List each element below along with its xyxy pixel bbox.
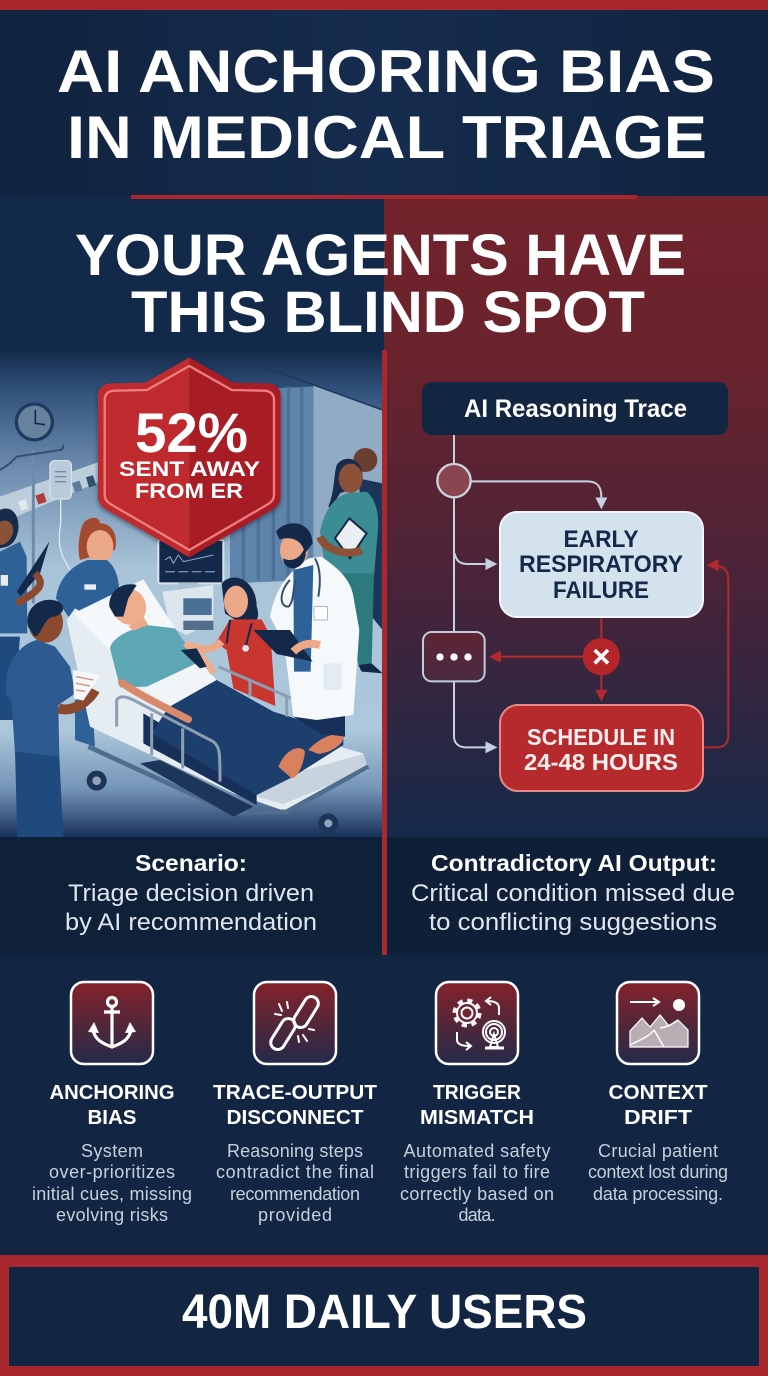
description: Automated safety	[404, 1141, 550, 1161]
right wall	[313, 385, 383, 590]
icon: anchor	[71, 982, 153, 1064]
IV stand and bag	[0, 445, 71, 603]
shield badge: 52% sent away from ER	[98, 357, 281, 557]
footer banner: 40M daily users: 40M DAILY USERS	[182, 1286, 587, 1339]
doctor	[253, 523, 359, 737]
label: ANCHORING	[50, 1081, 174, 1104]
heading: THIS BLIND SPOT	[131, 280, 645, 345]
pillow	[73, 579, 175, 652]
title: IN MEDICAL TRIAGE	[67, 104, 707, 171]
red-haired nurse	[56, 518, 119, 747]
icon: gear, arrows and signal tower	[436, 982, 518, 1064]
caption: scenario: by AI recommendation	[65, 909, 317, 936]
description: context lost during	[588, 1162, 728, 1182]
box: schedule in 24-48 hours: SCHEDULE IN	[527, 724, 675, 750]
blanket	[152, 680, 343, 795]
trace connectors	[454, 435, 601, 747]
description: contradict the final	[216, 1162, 374, 1182]
caption: scenario: Triage decision driven	[68, 880, 314, 907]
wall rail	[0, 462, 100, 523]
description: data processing.	[593, 1184, 723, 1204]
box: schedule in 24-48 hours: 24-48 HOURS	[524, 749, 678, 775]
box: early respiratory failure: RESPIRATORY	[519, 551, 683, 578]
box: early respiratory failure	[500, 512, 703, 617]
bed frame	[67, 608, 368, 833]
teal nurse	[320, 459, 383, 673]
description	[588, 1141, 728, 1204]
trace header	[422, 382, 728, 435]
box: early respiratory failure: FAILURE	[553, 577, 649, 604]
heading	[75, 223, 686, 345]
description: correctly based on	[400, 1184, 554, 1204]
description	[32, 1141, 192, 1225]
description	[400, 1141, 554, 1225]
vertical red divider	[382, 350, 387, 955]
factor: trigger mismatch	[400, 982, 554, 1225]
left half navy background	[0, 196, 384, 356]
trace header: AI Reasoning Trace	[464, 395, 687, 423]
factor: anchoring bias	[32, 982, 192, 1225]
label: TRACE-OUTPUT	[213, 1081, 377, 1104]
back person	[353, 448, 383, 630]
footer banner: 40M daily users	[0, 1255, 768, 1376]
factor: anchoring bias: BIAS	[88, 1106, 136, 1129]
description: triggers fail to fire	[404, 1162, 550, 1182]
caption: contradictory AI output: Critical condition missed due	[411, 880, 735, 907]
right half red background	[384, 196, 768, 838]
illustration: hospital triage scene	[0, 350, 383, 837]
shield badge: 52% sent away from ER: SENT AWAY	[119, 458, 260, 481]
caption: scenario: Scenario:	[135, 850, 247, 876]
curtain	[230, 367, 383, 583]
shield badge: 52% sent away from ER: 52%	[135, 401, 248, 464]
icon: arrow, sun and mountains	[617, 982, 699, 1064]
left nurse with tablet	[0, 509, 49, 720]
factor: context drift: DRIFT	[624, 1106, 693, 1129]
description: initial cues, missing	[32, 1184, 192, 1204]
contradiction connectors	[491, 565, 728, 747]
factor: trace-output disconnect: DISCONNECT	[226, 1106, 364, 1129]
caption: contradictory AI output: Contradictory AI Output:	[431, 850, 717, 876]
factor: trigger mismatch: MISMATCH	[420, 1106, 534, 1129]
bed rails	[117, 667, 321, 782]
title divider	[131, 195, 637, 199]
X conflict node	[583, 638, 620, 675]
caption: contradictory AI output	[387, 837, 768, 955]
front nurse with clipboard	[6, 600, 101, 837]
caption: contradictory AI output: to conflicting suggestions	[429, 909, 717, 936]
wall clock	[15, 402, 54, 442]
box: early respiratory failure: EARLY	[564, 526, 638, 553]
description: Crucial patient	[598, 1141, 718, 1161]
description: over-prioritizes	[49, 1162, 175, 1182]
icon: broken chain link	[254, 982, 336, 1064]
title band background	[0, 10, 768, 195]
label: TRIGGER	[433, 1081, 521, 1104]
top red bar	[0, 0, 768, 10]
factor: trace-output disconnect	[213, 982, 377, 1225]
patient arm	[122, 683, 188, 719]
title	[57, 38, 715, 171]
caption: scenario	[0, 837, 382, 955]
box: schedule in 24-48 hours	[500, 705, 703, 791]
label: CONTEXT	[608, 1081, 708, 1104]
title: AI ANCHORING BIAS	[57, 38, 715, 105]
patient feet	[278, 734, 343, 778]
description: Reasoning steps	[227, 1141, 363, 1161]
description: provided	[258, 1205, 332, 1225]
description	[216, 1141, 374, 1225]
description: System	[81, 1141, 143, 1161]
pending node	[423, 632, 485, 681]
trace start node	[437, 464, 471, 497]
description: recommendation	[230, 1184, 360, 1204]
red scrubs nurse	[190, 577, 275, 706]
patient monitor	[158, 540, 223, 635]
shield badge: 52% sent away from ER: FROM ER	[135, 480, 243, 503]
patient	[108, 584, 217, 707]
heading: YOUR AGENTS HAVE	[75, 223, 686, 288]
description: evolving risks	[56, 1205, 168, 1225]
factor: context drift	[588, 982, 728, 1204]
description: data.	[458, 1205, 496, 1225]
flowchart: AI reasoning trace	[422, 382, 728, 791]
